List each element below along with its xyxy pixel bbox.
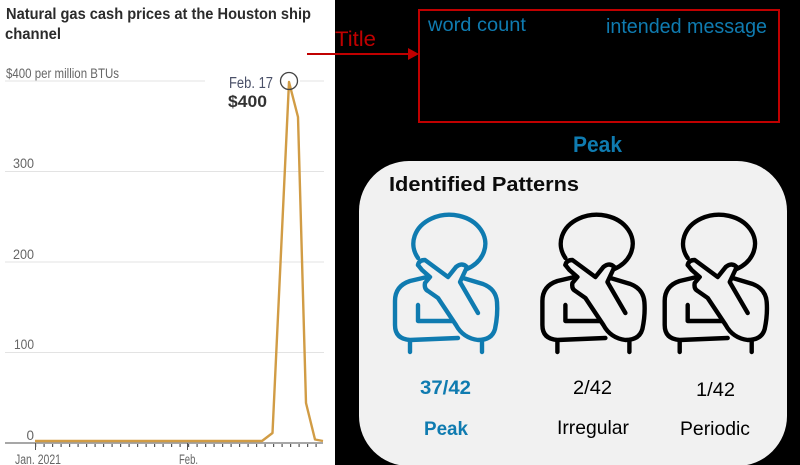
y axis unit label: $400 per million BTUs	[6, 66, 119, 81]
y axis labels: 0	[26, 428, 34, 443]
count: periodic: 1/42	[696, 380, 735, 401]
y axis labels: 200	[13, 247, 34, 262]
word count label: word count	[427, 14, 527, 36]
chart title: Natural gas cash prices at the Houston ship	[6, 6, 311, 23]
pattern label: periodic: Periodic	[680, 418, 750, 440]
icon: thinking person, peak	[395, 215, 497, 352]
peak marker circle	[280, 72, 298, 90]
panel: title box	[419, 10, 779, 122]
peak annotation	[228, 75, 273, 111]
icon: thinking person, periodic	[665, 215, 767, 352]
x axis	[5, 443, 323, 465]
panel: line chart	[0, 0, 335, 465]
price line	[35, 82, 323, 441]
peak annotation: $400	[228, 93, 267, 111]
label: Title: Title	[335, 28, 376, 51]
chart title	[5, 6, 311, 43]
chart title: channel	[5, 26, 61, 43]
panel: identified patterns	[359, 161, 787, 465]
y axis labels: 300	[13, 156, 34, 171]
y axis labels	[13, 156, 34, 443]
icon: thinking person, irregular	[542, 215, 645, 352]
intended message label: intended message	[606, 15, 767, 38]
pattern label: peak: Peak	[424, 418, 468, 440]
arrow: to title box	[307, 48, 419, 60]
peak annotation: Feb. 17	[229, 75, 273, 92]
count: irregular: 2/42	[573, 378, 612, 399]
heading: Peak: Peak	[573, 132, 623, 157]
panel heading: Identified Patterns	[389, 173, 579, 196]
y axis labels: 100	[14, 337, 34, 352]
count: peak: 37/42	[420, 378, 471, 399]
pattern label: irregular: Irregular	[557, 417, 629, 439]
